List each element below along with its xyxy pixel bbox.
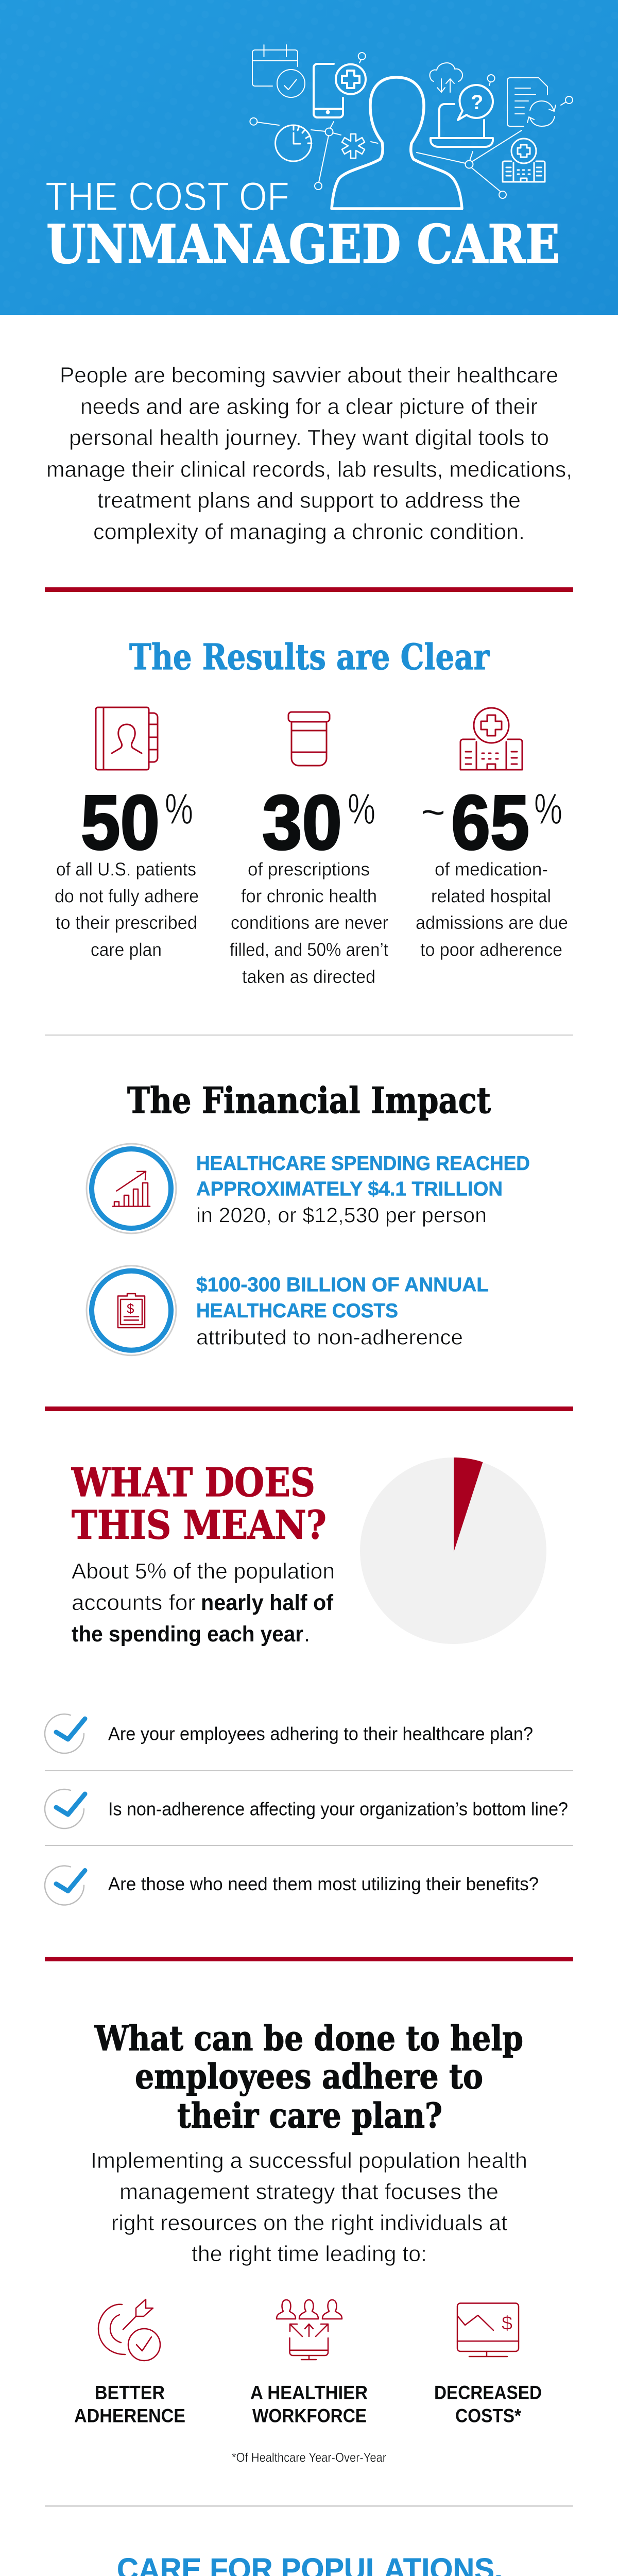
- stat: 50 percent: %: [165, 785, 193, 833]
- heading: what can be done: their care plan?: [177, 2095, 442, 2136]
- stat: about 65 percent: related hospital: [431, 886, 551, 907]
- intro paragraph: manage their clinical records, lab results, medications,: [46, 457, 572, 482]
- item: annual costs: attributed to non-adherence: [196, 1325, 463, 1349]
- stat: 50 percent: 50: [81, 779, 160, 866]
- network connectors: [250, 53, 573, 198]
- stat: 30 percent: taken as directed: [242, 966, 375, 987]
- icon: workforce over laptop: [277, 2300, 342, 2360]
- stat: 30 percent: conditions are never: [231, 912, 388, 933]
- benefit: decreased costs: [434, 2303, 542, 2426]
- stat: 30 percent: for chronic health: [241, 886, 377, 907]
- stat: about 65 percent: [416, 708, 568, 960]
- heading: what does this mean: WHAT DOES: [71, 1460, 315, 1505]
- stat: about 65 percent: admissions are due: [416, 912, 568, 933]
- icon: cloud: [430, 63, 462, 92]
- benefit: better adherence: [74, 2299, 185, 2426]
- intro paragraph: People are becoming savvier about their healthcare: [60, 363, 558, 387]
- item: healthcare spending: in 2020, or $12,530 per person: [196, 1204, 487, 1227]
- stat: about 65 percent: 65: [451, 779, 529, 866]
- text: five percent of population: [72, 1559, 335, 1647]
- icon: cost clipboard: $: [127, 1301, 134, 1316]
- icon: calendar: [252, 45, 305, 97]
- icon: target with check: [98, 2299, 160, 2361]
- stat: 30 percent: filled, and 50% aren’t: [230, 939, 388, 960]
- section: what can be done: [74, 2018, 542, 2465]
- stat: about 65 percent: to poor adherence: [420, 939, 562, 960]
- icon: phone with cross: [314, 64, 366, 117]
- text: five percent of population: About 5% of the population: [72, 1559, 335, 1584]
- stat: 30 percent: 30: [262, 779, 342, 866]
- item: healthcare spending: HEALTHCARE SPENDING REACHED: [196, 1153, 530, 1175]
- stat: 50 percent: care plan: [91, 939, 162, 960]
- benefit: better adherence: ADHERENCE: [74, 2405, 185, 2426]
- icon: patient record book: [96, 707, 158, 770]
- item: healthcare spending: APPROXIMATELY $4.1 TRILLION: [196, 1178, 503, 1200]
- benefit: a healthier workforce: WORKFORCE: [252, 2405, 367, 2426]
- text: implementing strategy: right resources on the right individuals at: [111, 2211, 507, 2235]
- icon: monitor with falling cost: $: [502, 2313, 512, 2334]
- heading: the results are clear: The Results are Clear: [129, 637, 490, 678]
- pie chart: five percent: [360, 1458, 546, 1644]
- text: five percent of population: .: [304, 1622, 310, 1647]
- checklist item 2: [45, 1789, 568, 1828]
- checklist item 1: [45, 1714, 533, 1753]
- intro paragraph: [46, 363, 572, 545]
- section: the financial impact: [87, 1080, 530, 1355]
- section: what does this mean: [45, 1458, 573, 1905]
- stat: about 65 percent: %: [534, 785, 562, 833]
- icon: hospital: [503, 139, 545, 182]
- intro paragraph: personal health journey. They want digital tools to: [69, 426, 549, 450]
- stat: 50 percent: do not fully adhere: [55, 886, 199, 907]
- title: the cost of: THE COST OF: [45, 174, 289, 219]
- item: annual costs: $100-300 BILLION OF ANNUAL: [196, 1274, 489, 1296]
- icon: question bubble: ?: [471, 91, 483, 114]
- stat: 50 percent: of all U.S. patients: [56, 859, 196, 880]
- text: five percent of population: nearly half of: [201, 1590, 334, 1615]
- icon: document with refresh: [507, 78, 556, 126]
- icon: pill bottle: [288, 712, 330, 766]
- heading: what can be done: employees adhere to: [135, 2056, 483, 2096]
- icon: star of life: [342, 134, 365, 158]
- icon: laptop: [431, 104, 493, 147]
- footnote: *Of Healthcare Year-Over-Year: [232, 2450, 386, 2465]
- checklist item 2: Is non-adherence affecting your organization’s bottom line?: [108, 1798, 568, 1820]
- stat: 30 percent: [230, 712, 388, 987]
- benefit: better adherence: BETTER: [95, 2382, 165, 2403]
- benefit: a healthier workforce: A HEALTHIER: [250, 2382, 368, 2403]
- intro paragraph: treatment plans and support to address the: [97, 488, 521, 513]
- icon: hospital: [460, 708, 522, 770]
- stat: 50 percent: to their prescribed: [56, 912, 197, 933]
- icon: clock: [276, 125, 312, 161]
- icon: question bubble: [458, 85, 493, 120]
- heading: what can be done: What can be done to help: [94, 2018, 523, 2058]
- icon: cost clipboard: [87, 1266, 176, 1355]
- stat: about 65 percent: of medication-: [435, 859, 548, 880]
- stat: 30 percent: of prescriptions: [248, 859, 370, 880]
- checklist item 1: Are your employees adhering to their healthcare plan?: [108, 1723, 533, 1744]
- heading: the financial impact: The Financial Impact: [127, 1080, 491, 1122]
- intro paragraph: needs and are asking for a clear picture of their: [80, 395, 538, 419]
- item: healthcare spending: [87, 1144, 530, 1233]
- icon: person silhouette: [332, 77, 462, 209]
- text: implementing strategy: the right time leading to:: [192, 2242, 427, 2266]
- checklist item 3: Are those who need them most utilizing their benefits?: [108, 1873, 539, 1894]
- benefit: decreased costs: DECREASED: [434, 2382, 542, 2403]
- benefit: decreased costs: COSTS*: [455, 2405, 522, 2426]
- item: annual costs: [87, 1266, 489, 1355]
- heading: what does this mean: [71, 1460, 327, 1548]
- stat: 30 percent: %: [348, 785, 375, 833]
- icon: spending growth chart: [87, 1144, 176, 1233]
- text: five percent of population: accounts for: [72, 1590, 195, 1615]
- stat: about 65 percent: ~: [421, 789, 445, 836]
- text: implementing strategy: Implementing a successful population health: [91, 2148, 527, 2173]
- heading: what does this mean: THIS MEAN?: [72, 1502, 327, 1548]
- text: five percent of population: the spending each year: [72, 1622, 303, 1647]
- section: the results are clear: [55, 637, 568, 987]
- text: implementing strategy: [91, 2148, 527, 2266]
- item: annual costs: HEALTHCARE COSTS: [196, 1300, 398, 1322]
- benefit: a healthier workforce: [250, 2300, 368, 2426]
- checklist item 3: [45, 1866, 539, 1905]
- header banner: [0, 0, 618, 315]
- text: implementing strategy: management strategy that focuses the: [119, 2179, 499, 2204]
- icon: monitor with falling cost: [457, 2303, 519, 2357]
- heading: what can be done: [94, 2018, 523, 2136]
- intro paragraph: complexity of managing a chronic condition.: [93, 520, 525, 545]
- stat: 50 percent: [55, 707, 199, 960]
